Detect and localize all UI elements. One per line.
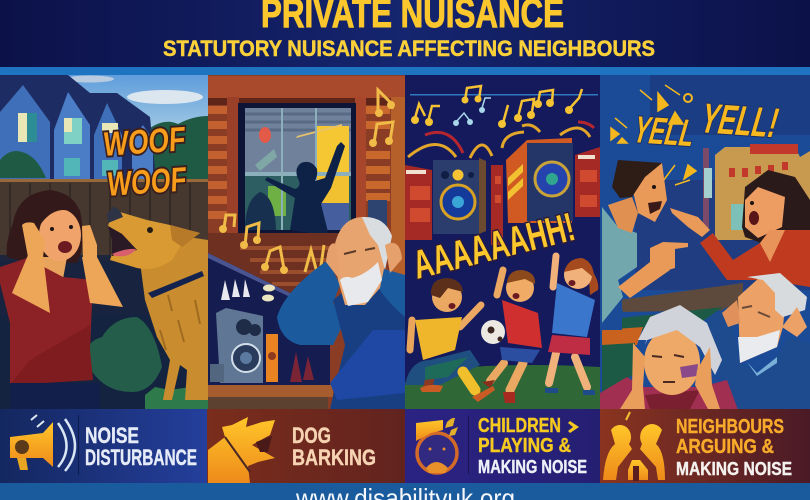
text: neighbours arguing and making noise: NEIGHBOURS [676,416,784,438]
brick walls [208,97,405,275]
sky [68,75,208,128]
music notes row [415,86,582,123]
subtitle: STATUTORY NUISANCE AFFECTING NEIGHBOURS [163,36,655,61]
icon: upset face [416,418,458,473]
red buildings [405,147,600,245]
sound bubble: woof woof: WOOF [103,120,186,164]
label: dog barking [207,409,405,483]
shout text: AAAAAAHH! [409,205,579,288]
dark room and railing [208,253,330,390]
sound bubble: woof woof [102,124,188,198]
old woman [600,305,738,410]
text: children playing and making noise: MAKING NOISE [478,457,587,477]
footer band with website [0,483,810,500]
label: children playing [405,409,600,483]
woman [670,170,810,287]
panel: neighbours arguing scene [600,75,810,410]
music notes [224,90,393,280]
window [238,103,356,233]
yellow building [703,144,810,240]
yell text [636,102,780,148]
speaker [210,308,314,383]
speaker left [433,158,486,234]
child blue [545,256,598,395]
old man [707,273,807,376]
sound arcs [408,125,590,158]
text: children playing and making noise: CHILDREN [478,415,561,437]
grass [405,365,600,409]
football [481,320,505,344]
shout shards [611,85,696,185]
icon: dog head [208,417,275,483]
text: neighbours arguing and making noise: ARGUING & [676,436,774,458]
text: noise disturbance: DISTURBANCE [85,445,197,470]
label: neighbours arguing [600,409,810,483]
dog [107,207,208,400]
sound bubble: woof woof: WOOF [107,160,187,204]
panel: noise disturbance scene with woman and barking dog [0,75,208,409]
text: neighbours arguing and making noise: MAKING NOISE [676,459,792,479]
stair zone [208,233,339,293]
yell text: YELL [628,109,700,155]
child red [482,270,542,403]
woman [0,190,123,409]
text: children playing and making noise: PLAYING & [478,435,571,457]
panel: dog barking scene with old man and loud window [208,75,405,409]
old man [277,217,405,409]
header band [0,0,810,75]
man [602,160,688,323]
text: noise disturbance: NOISE [85,423,139,448]
bench and stripes [600,283,743,393]
panel: children playing scene with speakers [405,75,600,409]
icon: megaphone [10,415,75,471]
chevron [568,421,579,433]
fence [0,179,208,261]
houses [0,75,156,180]
text: dog barking: BARKING [292,445,376,470]
child yellow [410,278,495,402]
bush [84,317,162,392]
label: noise disturbance [0,409,207,483]
speaker right [506,138,573,223]
trees [150,116,208,180]
icon: two arguing silhouettes [603,412,665,481]
silhouette [265,142,345,236]
text: dog barking: DOG [292,423,331,448]
